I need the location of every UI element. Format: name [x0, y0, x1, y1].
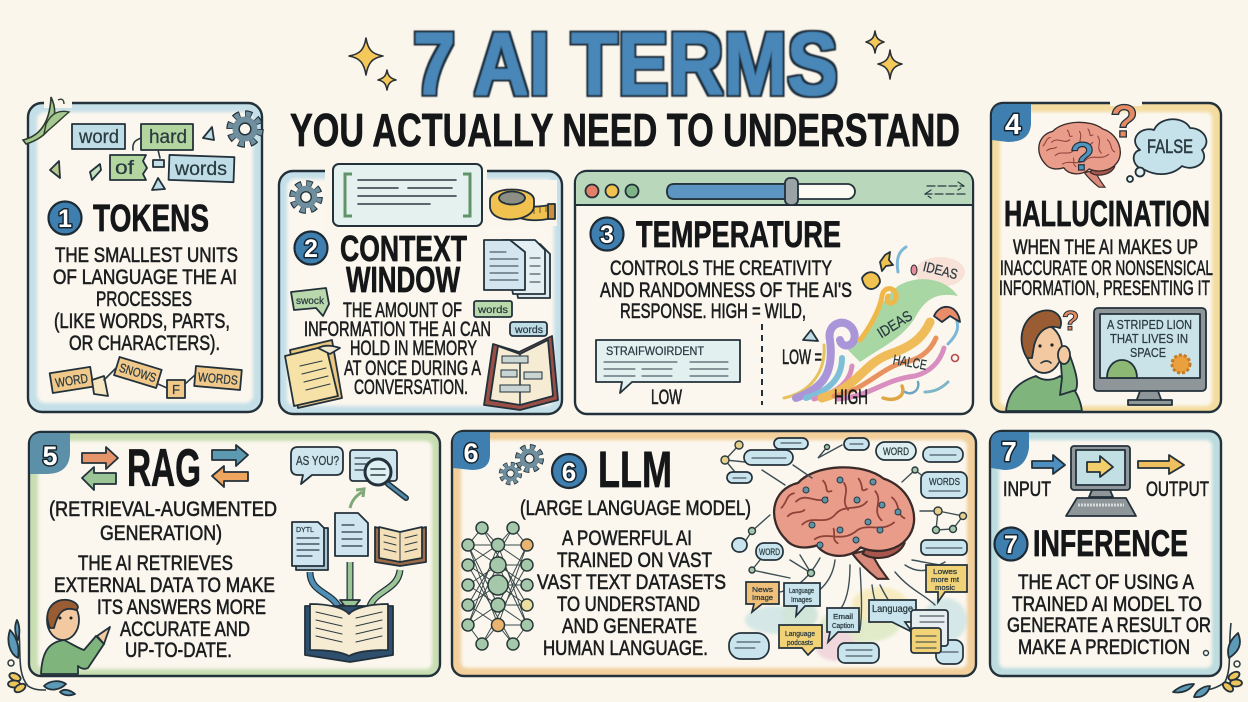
description: MAKE A PREDICTION	[1018, 636, 1190, 659]
description: UP-TO-DATE.	[125, 639, 232, 662]
window title bar	[576, 172, 972, 205]
panel 1: tokens	[23, 97, 262, 412]
subtitle: YOU ACTUALLY NEED TO UNDERSTAND	[290, 104, 960, 156]
icon: large brain	[774, 467, 914, 579]
temperature slider	[667, 178, 855, 205]
token chips bottom: WORDS	[197, 369, 239, 388]
text: blue bubble language: Language	[789, 588, 814, 595]
icon: doodle blobs	[803, 252, 960, 362]
token chips bottom: F	[172, 382, 180, 397]
radiating lines and network nodes	[721, 441, 966, 630]
number badge 1	[48, 202, 82, 234]
text: word bubble left: WORD	[759, 547, 780, 557]
panel 4: hallucination	[991, 95, 1221, 412]
speech bubbles around brain	[727, 438, 967, 664]
heading	[340, 228, 467, 300]
number badge 6	[453, 432, 490, 470]
low output bubble: STRAIFWOIRDENT	[606, 346, 704, 358]
text: ideas on ribbon: IDEAS	[874, 308, 916, 342]
icon: exchange arrows right	[212, 445, 248, 487]
subtitle	[49, 498, 277, 545]
icon: tape measure	[485, 180, 557, 226]
text: email bubble: Caption	[832, 623, 854, 630]
description: AND RANDOMNESS OF THE AI'S	[600, 279, 852, 302]
icon: gears	[501, 447, 541, 483]
number badge 6: 6	[463, 438, 479, 468]
icon: gear	[292, 184, 320, 210]
speech bubble: swock	[291, 288, 329, 316]
number badge 7 circle	[994, 528, 1028, 560]
person thinking	[1006, 310, 1082, 411]
description: HUMAN LANGUAGE.	[543, 637, 708, 660]
speech bubble: as you	[291, 447, 343, 484]
icon: context window frame	[325, 160, 487, 230]
description	[537, 527, 726, 660]
icon: input arrow	[1032, 455, 1065, 474]
description: INFORMATION THE AI CAN	[304, 318, 491, 341]
icon: source document 1	[292, 522, 328, 570]
text: yellow bubble top right: more mt	[931, 577, 959, 584]
heading: TEMPERATURE	[636, 214, 841, 255]
number badge 1: 1	[58, 205, 72, 233]
text: false: FALSE	[1147, 137, 1193, 158]
text: ideas top: IDEAS	[922, 258, 959, 282]
description: OR CHARACTERS).	[69, 332, 220, 355]
number badge 6 circle: 6	[562, 457, 576, 487]
token chips top: of	[115, 158, 135, 179]
icon: computer	[1066, 446, 1136, 516]
number badge 3: 3	[600, 221, 614, 249]
heading: LLM	[598, 441, 672, 498]
icon: open book	[484, 336, 558, 410]
screen text	[1107, 317, 1192, 360]
token chips top	[50, 124, 234, 190]
description	[999, 236, 1213, 300]
icon: small arrows	[925, 182, 965, 198]
colourful idea swirl	[784, 247, 965, 399]
description: TRAINED AI MODEL TO	[1012, 593, 1202, 616]
speech bubble: words blue: words	[514, 324, 543, 336]
description: CONVERSATION.	[354, 376, 468, 399]
number badge 6 circle	[552, 454, 586, 488]
number badge 7: 7	[1001, 436, 1017, 467]
description: RESPONSE. HIGH = WILD,	[620, 300, 806, 323]
number badge 5	[30, 433, 70, 474]
speech bubble: swock: swock	[296, 295, 325, 307]
icon: document stack	[484, 240, 550, 298]
description: CONTROLS THE CREATIVITY	[610, 257, 832, 280]
description	[1007, 571, 1211, 659]
speech bubble: words green	[474, 301, 512, 317]
text: orange bubble: News	[752, 587, 774, 594]
description: PROCESSES	[96, 288, 192, 311]
token chips bottom	[50, 357, 242, 398]
text: yellow bubble top right	[931, 569, 959, 592]
label: high: HIGH	[834, 386, 868, 409]
colour wash	[745, 587, 967, 661]
subtitle: (RETRIEVAL-AUGMENTED	[49, 498, 277, 521]
panel 6: LLM	[452, 431, 976, 676]
speech bubble: words green: words	[477, 304, 508, 316]
panel 3: temperature	[575, 171, 973, 414]
icon: blue question mark: ?	[1070, 135, 1094, 179]
number badge 3	[590, 218, 624, 250]
panel 2: context window	[279, 160, 562, 414]
description: THE SMALLEST UNITS	[55, 244, 238, 267]
text: language bubble: Language	[872, 604, 913, 615]
number badge 4	[992, 104, 1031, 142]
description	[53, 244, 238, 355]
monitor	[1094, 308, 1206, 405]
number badge 5: 5	[42, 441, 58, 471]
icon: note pages	[285, 340, 342, 408]
description: ITS ANSWERS MORE	[97, 596, 266, 619]
description: A POWERFUL AI	[562, 527, 692, 550]
token chips top: words	[174, 159, 227, 180]
heading: RAG	[127, 439, 201, 498]
text: yellow bubble top right: Lowes	[933, 569, 958, 576]
icon: large open book	[305, 604, 393, 662]
token chips top: hard	[149, 127, 187, 148]
icon: magnifier over document	[350, 450, 406, 498]
label: low equals: LOW =	[782, 346, 822, 369]
number badge 2: 2	[304, 235, 318, 263]
icon: source book	[375, 527, 426, 566]
description: TO UNDERSTAND	[557, 593, 700, 616]
decoration: bottom-right floral	[1173, 623, 1242, 697]
icon: gear	[230, 114, 260, 144]
low output bubble	[596, 340, 740, 393]
number badge 7	[991, 432, 1029, 470]
panel 7: inference	[990, 431, 1221, 676]
speech bubble: as you: AS YOU?	[296, 453, 339, 468]
description: THE AI RETRIEVES	[78, 552, 233, 575]
icon: source document 2	[335, 513, 368, 556]
token chips bottom: SNOWS	[117, 361, 158, 385]
icon: brain	[1039, 122, 1120, 187]
description: HOLD IN MEMORY	[350, 337, 477, 360]
icon: output arrow	[1138, 455, 1184, 474]
decoration: bottom-left floral	[8, 620, 75, 695]
number badge 7 circle: 7	[1004, 531, 1018, 559]
text: yellow bubble top right: mosic	[935, 585, 956, 592]
heading: WINDOW	[346, 259, 460, 300]
text: orange bubble: Image	[752, 595, 773, 602]
label: low: LOW	[651, 386, 682, 409]
text: yellow bubble bottom left: podcasts	[787, 640, 813, 647]
token chips top: word	[78, 127, 119, 148]
icon: left sparkles	[349, 38, 396, 90]
screen text: SPACE	[1130, 345, 1166, 360]
description: TRAINED ON VAST	[557, 549, 712, 572]
title: 7 AI TERMS: 7 AI TERMS	[413, 14, 838, 114]
description: EXTERNAL DATA TO MAKE	[54, 574, 275, 597]
icon: leaf swirl	[23, 97, 72, 144]
description: THE AMOUNT OF	[343, 299, 462, 322]
icon: up arrow	[350, 489, 364, 508]
number badge 4: 4	[1005, 109, 1021, 141]
text: email bubble: Email	[833, 614, 853, 621]
screen text: A STRIPED LION	[1107, 317, 1192, 332]
label: input: INPUT	[1003, 478, 1051, 501]
description	[304, 299, 491, 399]
description: VAST TEXT DATASETS	[537, 571, 726, 594]
panel 5: RAG	[29, 432, 440, 676]
icon: orange question mark: ?	[1110, 95, 1138, 147]
subtitle: (LARGE LANGUAGE MODEL)	[520, 497, 751, 520]
number badge 2	[294, 232, 328, 264]
heading: INFERENCE	[1033, 523, 1188, 564]
token chips bottom: WORD	[54, 370, 89, 390]
title block	[290, 14, 960, 156]
neural network	[462, 522, 533, 650]
heading: TOKENS	[93, 198, 209, 240]
icon: exchange arrows left	[82, 447, 118, 490]
thought cloud	[1127, 119, 1206, 182]
person pointing	[41, 600, 110, 674]
text: halce: HALCE	[892, 351, 928, 373]
label: output: OUTPUT	[1146, 478, 1209, 501]
text: email bubble	[832, 614, 854, 630]
text: orange bubble	[752, 587, 774, 602]
description	[54, 552, 275, 662]
description: THE ACT OF USING A	[1018, 571, 1194, 594]
retrieval arrows	[310, 562, 400, 620]
description	[600, 257, 852, 323]
text: words bubble: WORDS	[929, 476, 960, 488]
description: AT ONCE DURING A	[344, 357, 481, 380]
icon: question mark: ?	[1062, 305, 1079, 336]
speech bubble: words blue	[510, 322, 547, 336]
subtitle: GENERATION)	[100, 522, 222, 545]
icon: right sparkles	[866, 31, 902, 79]
screen text: THAT LIVES IN	[1110, 331, 1188, 346]
description: AND GENERATE	[562, 615, 697, 638]
description: (LIKE WORDS, PARTS,	[54, 310, 230, 333]
text: blue bubble language: Images	[791, 597, 812, 604]
icon: source document 1: DYTL	[296, 527, 314, 534]
description: OF LANGUAGE THE AI	[53, 266, 237, 289]
description: ACCURATE AND	[120, 618, 250, 641]
text: word bubble top: WORD	[883, 446, 909, 458]
text: blue bubble language	[789, 588, 814, 604]
text: yellow bubble bottom left: Language	[785, 631, 815, 638]
text: yellow bubble bottom left	[785, 631, 815, 647]
heading: CONTEXT	[340, 228, 467, 269]
